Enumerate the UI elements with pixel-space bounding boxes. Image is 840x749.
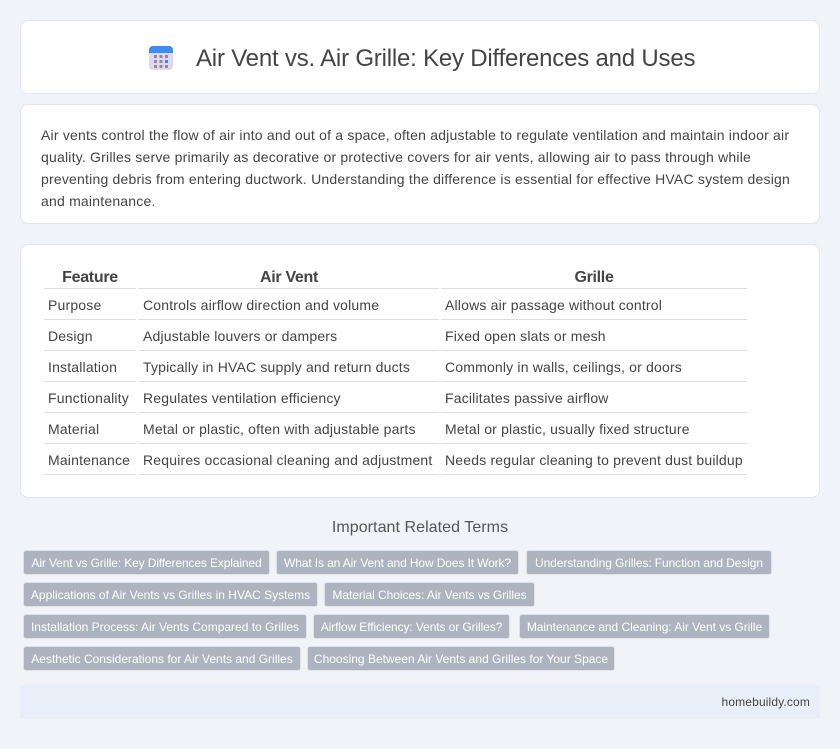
row: functionality: Facilitates passive airflow [445,390,609,406]
row: maintenance [48,452,743,468]
heading: related terms: Important Related Terms [332,519,508,536]
text block: introduction: quality. Grilles serve primarily as decorative or protective covers for air vents, allowing air to pass through while [41,149,751,165]
row: installation: Installation [48,359,117,375]
row: maintenance: Requires occasional cleaning and adjustment [143,452,432,468]
panel: comparison table [20,244,820,498]
row: installation: Commonly in walls, ceilings, or doors [445,359,682,375]
table header: Feature [62,269,118,286]
row: design: Fixed open slats or mesh [445,328,606,344]
row: installation [48,359,682,375]
row: maintenance: Maintenance [48,452,130,468]
row: maintenance: Needs regular cleaning to prevent dust buildup [445,452,743,468]
tags: related terms: Applications of Air Vents vs Grilles in HVAC Systems [31,588,310,602]
row: material: Metal or plastic, often with adjustable parts [143,421,416,437]
tags: related terms: Aesthetic Considerations for Air Vents and Grilles [31,652,293,666]
table header: Air Vent [260,269,318,286]
row: purpose: Purpose [48,297,101,313]
row: functionality: Functionality [48,390,129,406]
row: design: Adjustable louvers or dampers [143,328,337,344]
footer [20,685,820,719]
tags: related terms [23,550,772,671]
tags: related terms: Air Vent vs Grille: Key Differences Explained [31,556,262,570]
title: Air Vent vs. Air Grille: Key Differences and Uses [196,45,695,72]
row: material: Material [48,421,99,437]
footer credit: homebuildy.com [722,695,810,709]
text block: introduction: preventing debris from entering ductwork. Understanding the difference is essential for effective HVAC system design [41,171,790,187]
tags: related terms: Installation Process: Air Vents Compared to Grilles [31,620,299,634]
row: material: Metal or plastic, usually fixed structure [445,421,690,437]
row: functionality: Regulates ventilation efficiency [143,390,341,406]
row: purpose: Controls airflow direction and volume [143,297,379,313]
text block: introduction [41,127,790,209]
tags: related terms: Material Choices: Air Vents vs Grilles [332,588,527,602]
icon: calendar [149,46,173,70]
header panel [20,20,820,94]
text block: introduction: Air vents control the flow of air into and out of a space, often adjustable to regulate ventilation and maintain indoor air [41,127,789,143]
row: purpose [48,297,662,313]
table header [62,269,614,286]
row: installation: Typically in HVAC supply and return ducts [143,359,410,375]
tags: related terms: Choosing Between Air Vents and Grilles for Your Space [314,652,608,666]
row: material [48,421,690,437]
row: design: Design [48,328,93,344]
tags: related terms: What Is an Air Vent and How Does It Work? [284,556,511,570]
tags: related terms: Understanding Grilles: Function and Design [535,556,763,570]
tags: related terms: Airflow Efficiency: Vents or Grilles? [321,620,502,634]
panel: introduction [20,104,820,224]
tags: related terms: Maintenance and Cleaning: Air Vent vs Grille [527,620,762,634]
text block: introduction: and maintenance. [41,193,156,209]
row: purpose: Allows air passage without control [445,297,662,313]
row: functionality [48,390,609,406]
table header: Grille [574,269,614,286]
row: design [48,328,606,344]
